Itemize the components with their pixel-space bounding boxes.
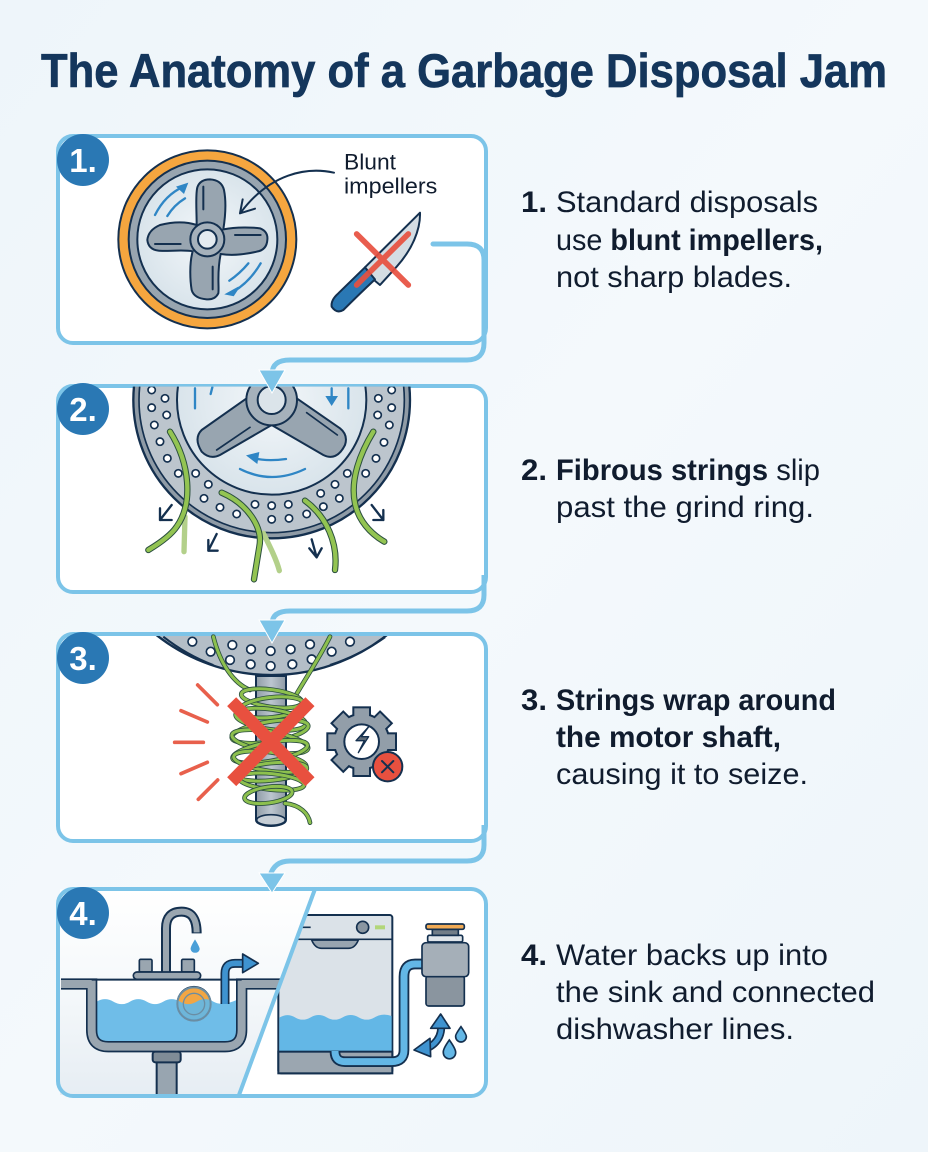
panel: step 1 impellers [58, 136, 486, 343]
callout: blunt impellers label [240, 149, 437, 213]
panel: step 3 motor shaft wrap [56, 632, 488, 843]
badge: number 2 [57, 383, 109, 435]
icon: red impact rays [175, 685, 218, 799]
text block: step 1: 1. [521, 186, 547, 219]
icon: strings wrapped around shaft [213, 637, 330, 823]
text block: step 3: the motor shaft, [556, 721, 781, 754]
icon: crossed-out sharp knife [332, 213, 420, 311]
icon: large red X [232, 702, 310, 782]
text block: step 1: use blunt impellers, [556, 224, 823, 257]
icon: sink with backed up water [60, 890, 280, 1095]
text block: step 2: Fibrous strings slip [556, 454, 820, 487]
callout: blunt impellers label: impellers [344, 173, 437, 198]
icon: fibrous green strings [148, 432, 384, 579]
icon: drain hose [335, 964, 423, 1062]
icon: two-way arrow and drips [414, 1014, 466, 1059]
icon: grind ring and impeller [132, 386, 412, 540]
badge: number 1 [57, 134, 109, 186]
icon: broken gear with error badge [328, 708, 402, 781]
badge: number 4 [57, 887, 109, 939]
panel: step 4 water backup [58, 889, 486, 1097]
text block: step 2: 2. [521, 454, 547, 487]
text block: step 4: dishwasher lines. [556, 1013, 794, 1046]
badge: number 3 [57, 632, 109, 684]
text block: step 3: causing it to seize. [556, 758, 808, 791]
arrow: step 2 to step 3 [259, 575, 484, 643]
icon: garbage disposal unit [422, 924, 469, 1006]
text block: step 4: 4. [521, 939, 547, 972]
arrow: step 1 to step 2 [259, 244, 484, 393]
badge: number 2: 2. [69, 391, 97, 428]
panel: step 2 grind ring [56, 384, 488, 594]
text block: step 3: 3. [521, 684, 547, 717]
callout: blunt impellers label: Blunt [344, 149, 396, 174]
badge: number 1: 1. [69, 142, 97, 179]
text block: step 4 [521, 939, 875, 1046]
text block: step 2: past the grind ring. [556, 491, 814, 524]
text block: step 4: the sink and connected [556, 976, 875, 1009]
badge: number 4: 4. [69, 895, 97, 932]
text block: step 4: Water backs up into [556, 939, 828, 972]
icon: motor shaft [256, 676, 286, 826]
text block: step 1 [521, 186, 823, 294]
text block: step 1: not sharp blades. [556, 261, 792, 294]
icon: downward motion arrows [160, 505, 383, 557]
icon: grind ring underside [156, 636, 388, 676]
title: The Anatomy of a Garbage Disposal Jam [41, 44, 887, 97]
text block: step 2 [521, 454, 820, 524]
text block: step 3 [521, 684, 836, 791]
badge: number 3: 3. [69, 640, 97, 677]
text block: step 1: Standard disposals [556, 186, 818, 219]
text block: step 3: Strings wrap around [556, 684, 836, 717]
arrow: step 3 to step 4 [259, 825, 484, 893]
icon: flooded dishwasher [278, 915, 392, 1073]
icon: disposal impeller plate [118, 150, 296, 328]
icon: overflow arrow from sink [225, 954, 258, 1004]
